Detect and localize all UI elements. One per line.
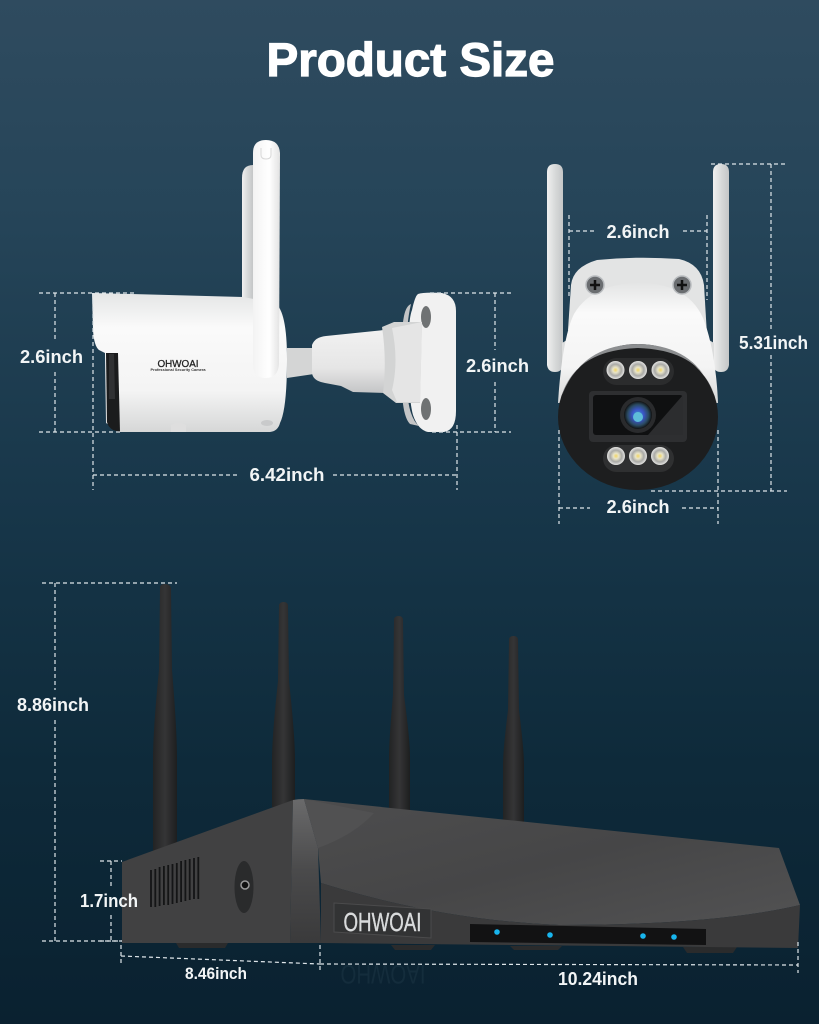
label: 2.6inch	[606, 222, 670, 242]
indicator bar	[470, 924, 706, 945]
mount height	[430, 293, 529, 432]
side camera length	[93, 293, 457, 490]
back antenna	[242, 165, 253, 300]
label: 8.86inch	[17, 695, 89, 715]
front lens strip	[106, 353, 120, 432]
front corner	[290, 799, 321, 943]
front camera height	[651, 164, 808, 491]
antenna hinges	[562, 337, 714, 363]
label: 8.46inch	[185, 964, 247, 983]
right antenna	[713, 164, 729, 372]
left antenna	[547, 164, 563, 372]
top LED cluster	[603, 358, 674, 385]
camera body	[92, 293, 287, 432]
mount screws	[586, 276, 691, 294]
lens panel	[589, 391, 687, 442]
top lighter surface	[304, 799, 800, 925]
lower front band	[321, 883, 800, 948]
label: 1.7inch	[80, 891, 138, 911]
feet	[176, 943, 737, 953]
NVR reflection text: OHWOAI	[340, 959, 426, 989]
vent grille	[151, 857, 198, 907]
NVR antenna 1	[153, 584, 177, 852]
label: 2.6inch	[466, 356, 529, 376]
camera logo: Professional Security Camera	[150, 367, 206, 372]
side panel	[122, 800, 293, 943]
front camera top width	[569, 215, 707, 300]
black face	[558, 344, 718, 490]
camera barrel	[558, 283, 718, 403]
side view camera	[92, 140, 456, 432]
NVR recorder	[122, 584, 800, 989]
mounting plate	[408, 293, 456, 432]
label: 2.6inch	[20, 347, 83, 367]
title: Product Size	[266, 33, 554, 86]
label: 2.6inch	[606, 497, 670, 517]
side camera height left	[20, 293, 135, 432]
power connector	[234, 861, 254, 913]
NVR antenna 4	[503, 636, 524, 824]
NVR antenna 2	[272, 602, 295, 807]
label: 5.31inch	[739, 333, 808, 353]
NVR width	[320, 942, 798, 989]
front view camera	[547, 164, 729, 490]
label: 10.24inch	[558, 969, 638, 989]
camera logo	[150, 358, 206, 372]
NVR total height	[17, 583, 177, 941]
OHWOAI brand plate: OHWOAI	[344, 907, 422, 937]
body screw detail	[171, 423, 186, 432]
NVR body height	[80, 861, 138, 941]
NVR antenna 3	[389, 616, 410, 811]
front antenna	[253, 140, 280, 378]
ball joint arm	[287, 322, 422, 403]
NVR depth	[121, 945, 320, 983]
label: 6.42inch	[250, 465, 324, 485]
front camera bottom width	[559, 430, 718, 524]
bottom LED cluster	[603, 445, 674, 472]
camera logo: OHWOAI	[158, 358, 198, 370]
wall mount	[568, 258, 707, 335]
OHWOAI brand plate	[334, 903, 431, 938]
